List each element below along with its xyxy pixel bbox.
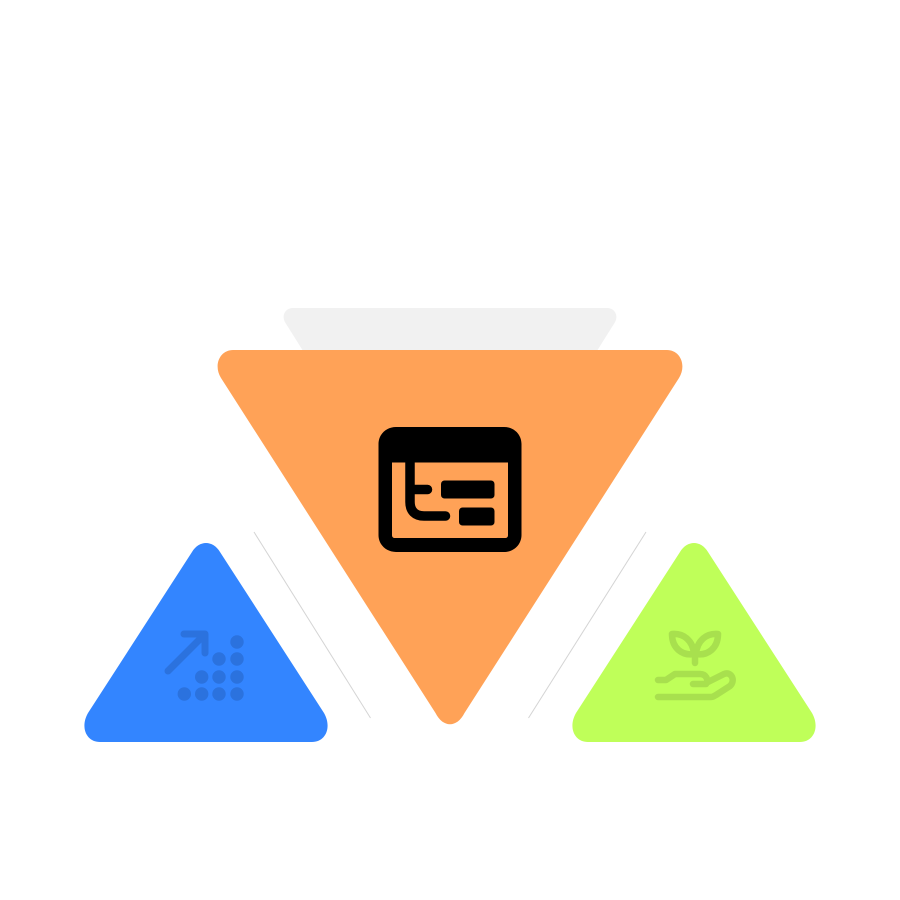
dot grid (178, 635, 244, 701)
panel: blue triangle (84, 543, 328, 742)
icon: growth arrow and dots (168, 634, 244, 701)
task bar: upper (441, 480, 494, 498)
icon: gantt window (378, 427, 522, 552)
divider line: left (254, 532, 370, 718)
panel: grey back triangle (284, 308, 616, 362)
panel: orange triangle (218, 350, 682, 724)
task bar: lower (459, 508, 494, 526)
stem (692, 652, 698, 663)
divider line: right (528, 532, 646, 718)
right leaf (696, 634, 718, 654)
tree connectors (410, 462, 446, 516)
arrow (168, 634, 205, 671)
icon: plant in hand (658, 634, 733, 697)
hand (658, 673, 733, 697)
panel: green triangle (572, 543, 816, 742)
left leaf (672, 634, 694, 654)
window frame (378, 427, 522, 552)
